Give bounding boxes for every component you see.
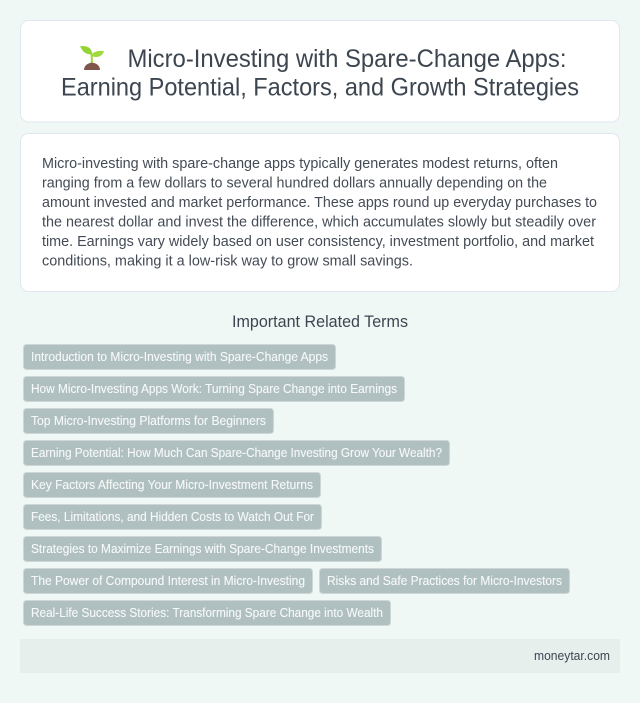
summary paragraph: Micro-investing with spare-change apps typically generates modest returns, often <box>42 155 558 172</box>
summary paragraph: conditions, making it a low-risk way to grow small savings. <box>42 252 413 270</box>
summary paragraph <box>42 155 597 270</box>
panel: title card <box>20 20 620 122</box>
tag: strategies <box>24 536 382 562</box>
tag: top platforms: Top Micro-Investing Platforms for Beginners <box>31 414 266 428</box>
tag: top platforms <box>24 408 274 434</box>
title: Earning Potential, Factors, and Growth Strategies <box>61 74 579 102</box>
tag: risks: Risks and Safe Practices for Micro-Investors <box>327 574 562 588</box>
tag: how apps work <box>24 376 404 402</box>
tag: earning potential: Earning Potential: How Much Can Spare-Change Investing Grow Your Wealth? <box>31 446 442 460</box>
title <box>61 45 579 102</box>
tag: fees <box>24 504 322 530</box>
tag: how apps work: How Micro-Investing Apps Work: Turning Spare Change into Earnings <box>31 382 397 396</box>
tag: success stories <box>24 600 390 626</box>
tag: earning potential <box>24 440 450 466</box>
tag: fees: Fees, Limitations, and Hidden Costs to Watch Out For <box>31 510 314 524</box>
tag: introduction: Introduction to Micro-Investing with Spare-Change Apps <box>31 350 328 364</box>
tag: risks <box>320 568 570 594</box>
tag: key factors: Key Factors Affecting Your Micro-Investment Returns <box>31 478 313 492</box>
panel: summary card <box>20 134 620 292</box>
tag list <box>24 344 570 626</box>
heading: related terms: Important Related Terms <box>232 312 408 331</box>
icon: seedling <box>80 46 104 70</box>
tag: compound interest <box>24 568 312 594</box>
summary paragraph: ranging from a few dollars to several hundred dollars annually depending on the <box>42 174 547 192</box>
footer <box>20 639 620 673</box>
tag: introduction <box>24 344 336 370</box>
tag: key factors <box>24 472 320 498</box>
tag: success stories: Real-Life Success Stories: Transforming Spare Change into Wealth <box>31 606 383 620</box>
tag: strategies: Strategies to Maximize Earnings with Spare-Change Investments <box>31 542 374 556</box>
tag: compound interest: The Power of Compound Interest in Micro-Investing <box>31 574 305 588</box>
footer: moneytar.com <box>534 649 610 663</box>
summary paragraph: the nearest dollar and invest the difference, which accumulates slowly but steadily over <box>42 214 596 230</box>
summary paragraph: time. Earnings vary widely based on user consistency, investment portfolio, and market <box>42 233 595 250</box>
title: Micro-Investing with Spare-Change Apps: <box>128 45 566 73</box>
summary paragraph: amount invested and market performance. These apps round up everyday purchases to <box>42 194 597 211</box>
